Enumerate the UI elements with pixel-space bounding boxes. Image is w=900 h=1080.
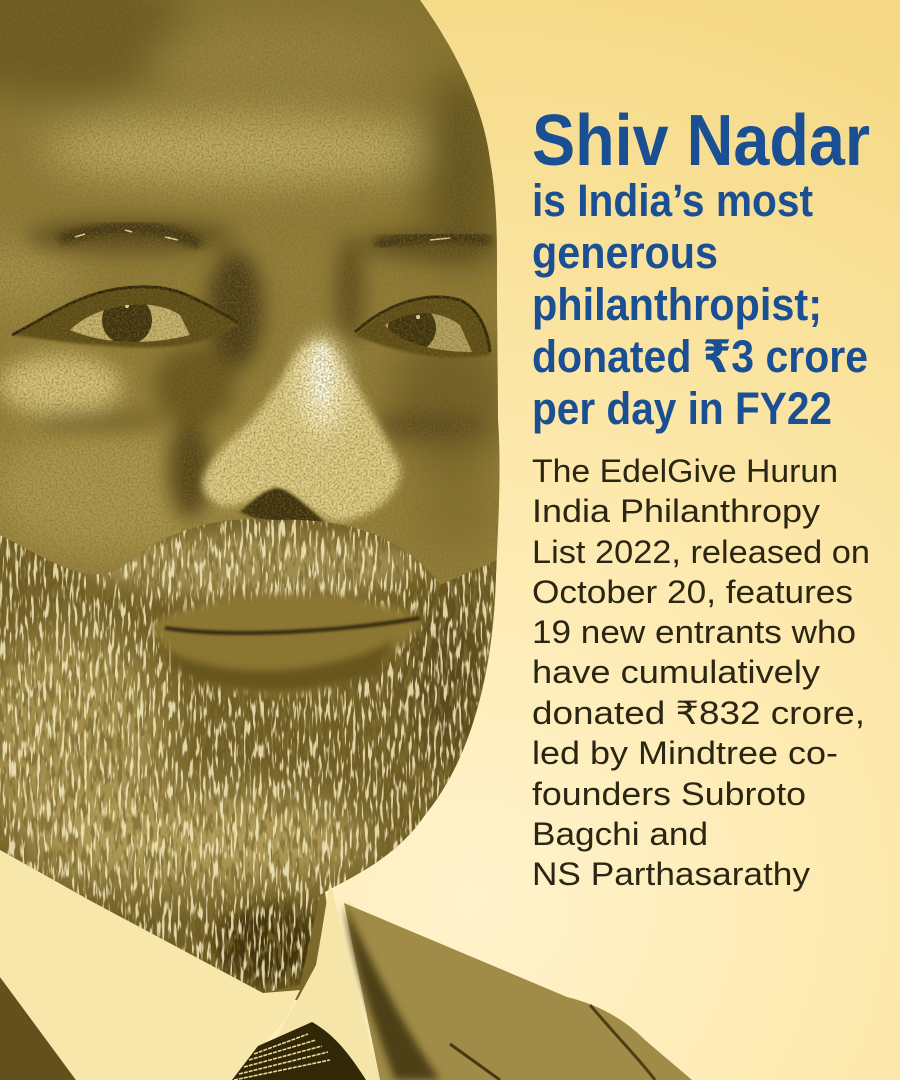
- subhead line 1: is India’s most: [532, 175, 813, 226]
- body paragraph: have cumulatively: [532, 654, 820, 690]
- body paragraph: List 2022, released on: [532, 534, 870, 570]
- portrait photo of Shiv Nadar: [0, 0, 692, 1080]
- body paragraph: NS Parthasarathy: [532, 856, 810, 892]
- body paragraph: led by Mindtree co-: [532, 735, 838, 771]
- shirt collar: [0, 850, 380, 1080]
- headline: [532, 101, 870, 434]
- skin grain: [0, 0, 500, 898]
- necktie: [232, 1022, 366, 1080]
- body paragraph: [532, 453, 870, 892]
- suit jacket: [0, 903, 692, 1080]
- body paragraph: 19 new entrants who: [532, 614, 856, 650]
- shaded and lit skin areas: [0, 0, 510, 555]
- body paragraph: The EdelGive Hurun: [532, 453, 838, 489]
- subhead line 3: philanthropist;: [532, 279, 822, 330]
- right eye: [355, 297, 490, 360]
- mouth and lips: [150, 594, 425, 695]
- nose: [202, 335, 400, 524]
- head and face: [0, 0, 520, 1010]
- body paragraph: Bagchi and: [532, 816, 708, 852]
- name: Shiv Nadar: Shiv Nadar: [532, 101, 870, 181]
- body paragraph: October 20, features: [532, 574, 853, 610]
- subhead line 4: donated ₹3 crore: [532, 331, 868, 382]
- subhead line 2: generous: [532, 227, 718, 278]
- body paragraph: donated ₹832 crore,: [532, 695, 865, 731]
- body paragraph: founders Subroto: [532, 776, 806, 812]
- eyebrows: [60, 228, 490, 245]
- subhead line 5: per day in FY22: [532, 383, 832, 434]
- beard and moustache: [0, 510, 520, 1010]
- left eye: [12, 287, 238, 350]
- body paragraph: India Philanthropy: [532, 493, 820, 529]
